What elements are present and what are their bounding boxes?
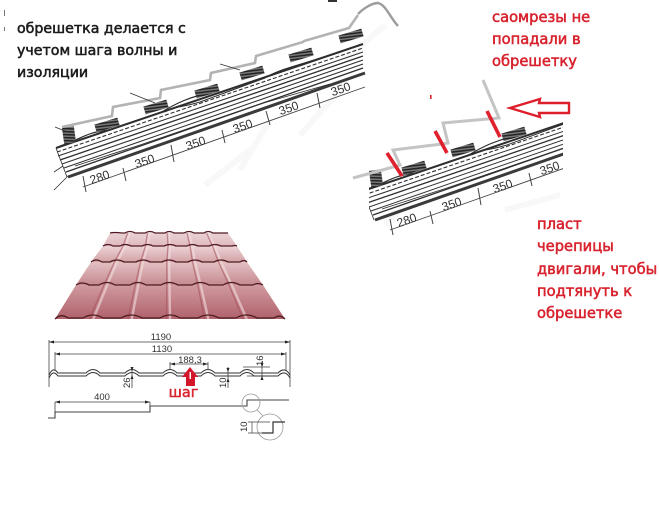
- red note: lower right: пласт: [537, 216, 582, 233]
- profile dimension numbers: 188,3: [178, 355, 202, 366]
- heading: black note: обрешетка делается с: [17, 21, 186, 37]
- dimensions right: 280: [395, 210, 419, 230]
- red note: top right: [492, 9, 590, 70]
- double wave line: [49, 370, 290, 378]
- dimensions left: 280: [88, 167, 112, 187]
- profile dimension numbers: 16: [255, 355, 266, 366]
- detail circles: [242, 394, 283, 440]
- profile dimension numbers: 26: [122, 377, 133, 388]
- dimensions left: 350: [329, 79, 353, 99]
- red up arrow: [182, 367, 198, 386]
- dimensions left: 350: [184, 133, 208, 153]
- dimensions right: 350: [538, 158, 562, 178]
- faint watermark stripes: [205, 25, 560, 225]
- arrow slit: [190, 372, 191, 379]
- dimensions left: 350: [231, 116, 255, 136]
- roof section diagram: right: [352, 80, 570, 236]
- roof section diagram: left: [54, 3, 398, 192]
- grey tile moved up: [353, 80, 499, 178]
- red note: top right: попадали в: [492, 31, 581, 48]
- dimensions right: [395, 158, 562, 230]
- ridge cap: [358, 3, 398, 26]
- red note: lower right: подтянуть к: [537, 283, 632, 300]
- enlarged step: [262, 422, 285, 433]
- sheet ribs: [93, 233, 247, 319]
- red note: lower right: обрешетке: [537, 305, 622, 322]
- red note: lower right: двигали, чтобы: [537, 261, 657, 278]
- profile dimension numbers: 1130: [152, 344, 172, 355]
- dimensions left: [88, 79, 353, 187]
- profile dimension numbers: [122, 332, 266, 388]
- heading: black note: [17, 21, 186, 81]
- left edge marks: [4, 0, 337, 31]
- upper battens: [239, 29, 364, 80]
- heading: black note: учетом шага волны и: [17, 43, 177, 59]
- grey tile profile: [62, 15, 358, 127]
- extension and dimension lines: [49, 340, 290, 388]
- step label: шаг: [169, 385, 198, 401]
- red outline arrow: [510, 99, 569, 117]
- metal roof tile sheet: [55, 232, 285, 319]
- small red tick: [430, 95, 432, 99]
- profile dimension numbers: 10: [218, 377, 229, 388]
- leader lines: [54, 64, 240, 190]
- red note: top right: саомрезы не: [492, 9, 590, 26]
- step profile drawing: 10: [239, 421, 250, 432]
- dimensions left: 350: [133, 151, 157, 171]
- step profile drawing: 400: [94, 392, 110, 403]
- tile step lines: [55, 232, 285, 319]
- dimensions left: 350: [277, 98, 301, 118]
- profile dimension numbers: 1190: [151, 332, 171, 343]
- dimensions right: 350: [440, 194, 464, 214]
- dimension arrowheads: [49, 340, 290, 382]
- red note: top right: обрешетку: [492, 53, 577, 70]
- heading: black note: изоляции: [17, 65, 88, 81]
- step profile drawing: [48, 392, 289, 440]
- red note: lower right: черепицы: [537, 238, 614, 255]
- dimensions right: 350: [491, 176, 515, 196]
- red cut marks: [387, 111, 500, 176]
- red note: lower right: [537, 216, 657, 322]
- wave profile drawing with dimensions: [49, 332, 290, 401]
